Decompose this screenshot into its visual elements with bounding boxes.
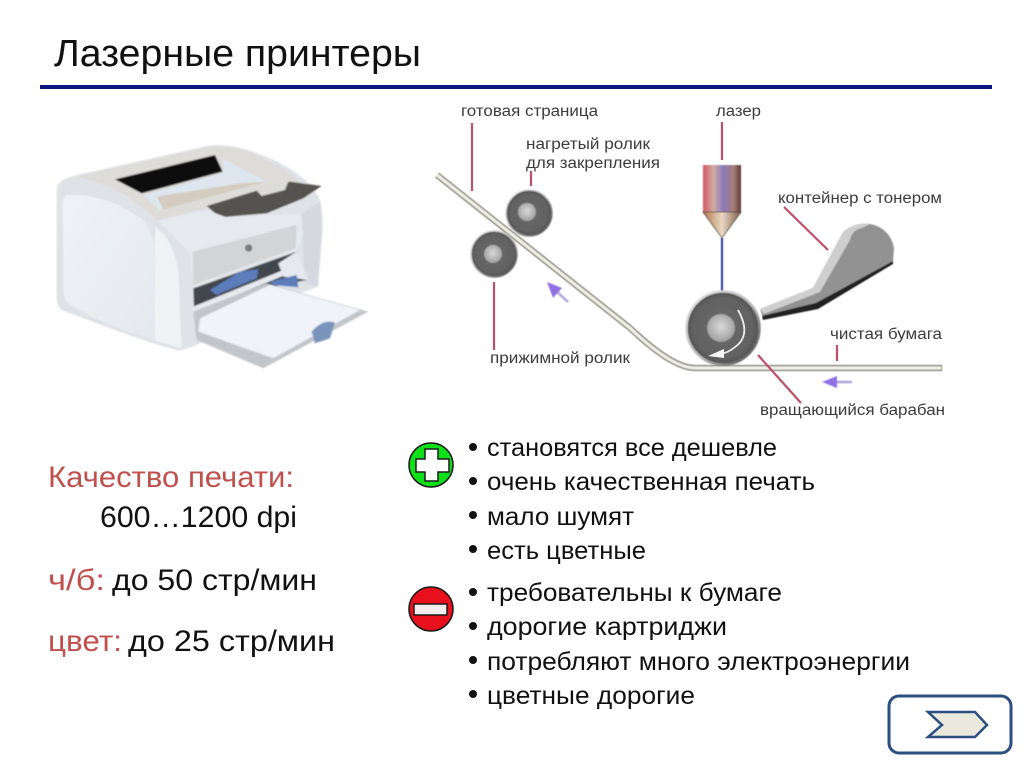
label: heated fuser roller: нагретый ролик: [526, 136, 650, 153]
logo: [245, 244, 252, 252]
colour speed: до 25 стр/мин: [128, 625, 335, 658]
leader: heated roller: [530, 171, 532, 186]
drum rotation arrow: [708, 310, 744, 358]
toner container: [760, 224, 894, 320]
arrow: paper direction diagonal: [547, 282, 568, 302]
label: laser: лазер: [716, 103, 761, 120]
slot lip: [193, 269, 285, 313]
paper guide: [312, 322, 335, 343]
disadvantages list: цветные дорогие: [487, 682, 695, 710]
printer photo: [57, 145, 368, 368]
laser beam: [721, 238, 723, 291]
top glass area: [143, 158, 267, 210]
blue guides: [210, 269, 298, 295]
print quality: [48, 461, 297, 534]
label: pressure roller: прижимной ролик: [490, 350, 630, 367]
colour speed: цвет:: [48, 625, 122, 658]
bw speed: до 50 стр/мин: [112, 564, 317, 597]
output tray: [207, 182, 322, 217]
advantages list: становятся все дешевле: [487, 434, 777, 462]
title rule: [40, 85, 992, 89]
rotating drum: [686, 292, 760, 364]
label: finished page: готовая страница: [461, 103, 598, 120]
white inner area: [278, 252, 308, 280]
bw speed: ч/б:: [48, 564, 105, 597]
label: heated fuser roller: [526, 136, 660, 172]
advantages list: очень качественная печать: [487, 468, 815, 496]
colour speed: [48, 625, 335, 658]
side bevel: [155, 227, 182, 348]
disadvantages list: [469, 579, 910, 710]
leader: drum: [758, 355, 801, 403]
printer body: [57, 145, 323, 351]
control strip: [257, 182, 288, 196]
paper tray: [193, 283, 368, 368]
right column: [302, 202, 322, 286]
paper sheet: [198, 285, 360, 358]
icon: plus: [409, 443, 453, 487]
next button: [889, 696, 1011, 753]
printer front: [158, 210, 305, 287]
disadvantages list: потребляют много электроэнергии: [487, 648, 910, 676]
advantages list: мало шумят: [487, 503, 635, 531]
advantages list: [469, 434, 815, 565]
title: Лазерные принтеры: [54, 33, 421, 75]
front cover panel: [193, 225, 297, 285]
label: heated fuser roller: для закрепления: [526, 155, 660, 172]
label: toner container: контейнер с тонером: [778, 190, 942, 207]
leader: finished page: [471, 123, 473, 191]
leader: toner: [784, 207, 828, 250]
icon: minus: [409, 587, 453, 631]
paper slot interior: [193, 252, 307, 307]
leader: clean paper: [836, 345, 838, 361]
heated roller: [506, 190, 552, 236]
printer top surface: [77, 146, 312, 220]
arrow: paper direction horizontal: [822, 376, 852, 388]
leader: laser: [721, 122, 723, 160]
disadvantages list: дорогие картриджи: [487, 613, 727, 641]
printer side panel: [63, 195, 155, 340]
leader: pressure roller: [493, 282, 495, 350]
print quality: 600…1200 dpi: [100, 501, 297, 534]
label: clean paper: чистая бумага: [830, 326, 942, 343]
advantages list: есть цветные: [487, 537, 646, 565]
label: rotating drum: вращающийся барабан: [760, 402, 945, 419]
output slot: [115, 155, 223, 193]
pressure roller: [471, 231, 517, 277]
disadvantages list: требовательны к бумаге: [487, 579, 782, 607]
laser unit: [703, 165, 741, 238]
print quality: Качество печати:: [48, 461, 294, 494]
beige strip: [157, 182, 267, 209]
paper path: [437, 175, 942, 368]
